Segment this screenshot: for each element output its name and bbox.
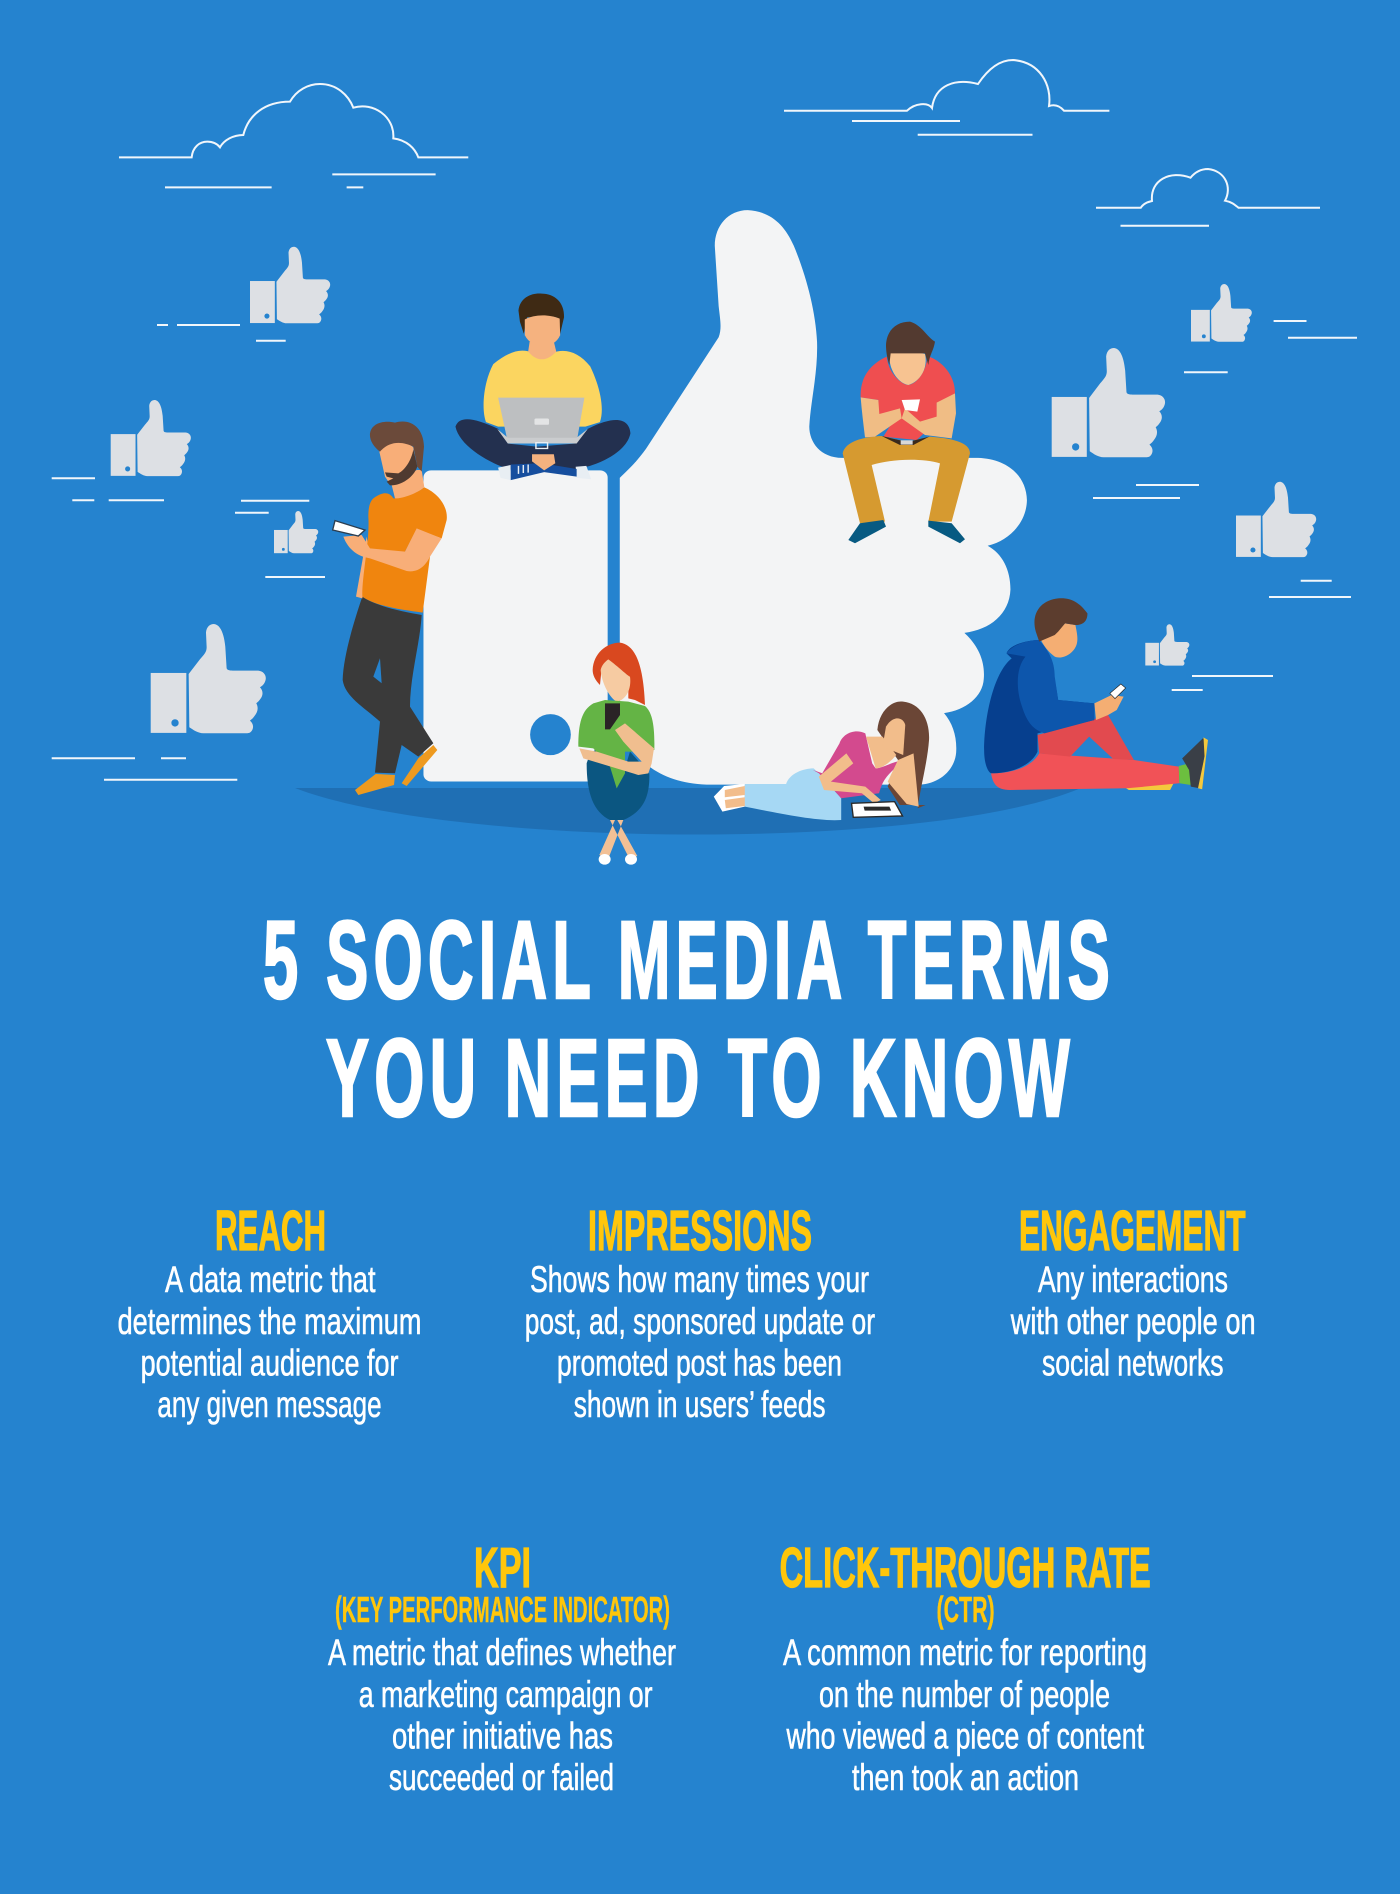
laptop — [498, 398, 584, 442]
supporting arm — [888, 753, 919, 807]
left arm — [356, 537, 369, 598]
description: click-through rate — [783, 1632, 1147, 1798]
thumb icon: upper left — [157, 247, 330, 341]
subheading: kpi: (KEY PERFORMANCE INDICATOR) — [335, 1589, 670, 1630]
shoes — [599, 854, 611, 865]
cloud: top centre — [784, 60, 1109, 135]
face — [601, 659, 630, 702]
subheading: ctr: (CTR) — [936, 1589, 995, 1630]
buckle — [901, 440, 913, 445]
shoes — [355, 745, 437, 795]
thumb icon: left — [52, 400, 191, 500]
description: reach — [118, 1259, 421, 1425]
illustration: giant thumbs up and seated man — [423, 210, 1027, 785]
thumb icon: upper right — [1184, 284, 1357, 372]
term: click-through rate — [780, 1536, 1151, 1798]
person: man with red shirt — [843, 322, 970, 543]
socks — [714, 784, 745, 812]
soles — [498, 465, 591, 480]
description: kpi: a marketing campaign or — [359, 1674, 652, 1715]
hand — [1094, 695, 1124, 720]
face — [1041, 623, 1077, 658]
trouser: extended leg — [991, 753, 1179, 790]
hood and sleeve — [1007, 640, 1094, 733]
description: reach: A data metric that — [165, 1259, 376, 1300]
belt — [882, 436, 929, 445]
description: reach: potential audience for — [141, 1343, 398, 1384]
far foot — [1124, 783, 1174, 790]
trousers — [843, 436, 970, 523]
giant thumb cuff — [423, 470, 608, 781]
arms — [579, 723, 654, 775]
face — [379, 442, 416, 484]
hair — [593, 643, 645, 705]
face — [525, 315, 560, 346]
belt — [536, 443, 548, 448]
hair — [886, 322, 935, 365]
description: click-through rate: on the number of people — [819, 1674, 1110, 1715]
description: reach: determines the maximum — [118, 1301, 421, 1342]
phone — [605, 703, 620, 729]
neck — [392, 470, 424, 498]
title — [263, 899, 1115, 1140]
beard — [385, 449, 417, 485]
sock — [1179, 763, 1191, 785]
shirt — [813, 731, 900, 798]
giant thumb hand — [620, 210, 1027, 785]
description: engagement — [1010, 1259, 1256, 1384]
feet — [725, 786, 745, 808]
phone — [902, 399, 920, 412]
hair — [518, 293, 564, 334]
description: impressions: post, ad, sponsored update or — [525, 1301, 875, 1342]
shins — [599, 820, 637, 859]
phone — [1110, 684, 1126, 699]
description: kpi: succeeded or failed — [389, 1757, 614, 1798]
term: impressions — [525, 1199, 875, 1425]
heading: reach: REACH — [215, 1199, 326, 1263]
description: engagement: Any interactions — [1038, 1259, 1228, 1300]
tablet — [852, 802, 903, 817]
hoodie body — [984, 640, 1094, 773]
knee gap — [373, 658, 382, 683]
thumb icon: large right — [1052, 348, 1199, 498]
sweater — [484, 351, 602, 427]
heading: kpi: KPI — [474, 1536, 531, 1600]
term: engagement — [1010, 1199, 1256, 1384]
term: kpi — [328, 1536, 676, 1798]
cloud: top right — [1096, 169, 1320, 226]
description: kpi: A metric that defines whether — [328, 1632, 676, 1673]
shoe sole — [1198, 737, 1208, 789]
hair — [877, 701, 929, 808]
legs — [587, 749, 649, 820]
chest — [866, 737, 896, 768]
thumb icon: small left — [235, 501, 325, 577]
shirt — [861, 356, 955, 440]
shoes — [848, 520, 965, 543]
description: click-through rate: A common metric for reporting — [783, 1632, 1147, 1673]
description: impressions: shown in users’ feeds — [574, 1384, 826, 1425]
neck — [528, 342, 556, 359]
thumb icon: small right — [1145, 624, 1273, 690]
t-shirt — [362, 487, 447, 613]
description: reach: any given message — [157, 1384, 382, 1425]
laptop base — [497, 429, 588, 444]
person: sitting man in blue hoodie — [984, 598, 1208, 790]
sneakers — [511, 463, 577, 480]
description: kpi: other initiative has — [392, 1716, 613, 1757]
tablet screen — [864, 807, 891, 811]
trouser: raised leg — [1038, 715, 1134, 760]
thumb icon: lower left — [52, 624, 266, 780]
hair — [370, 422, 424, 472]
heading: impressions: IMPRESSIONS — [588, 1199, 812, 1263]
face — [883, 718, 905, 755]
trousers — [745, 768, 841, 820]
person: man with orange shirt — [333, 422, 447, 795]
description: impressions: Shows how many times your — [530, 1259, 869, 1300]
cloud: top left — [119, 84, 468, 187]
person: woman with red hair — [578, 643, 654, 865]
ground shadow — [295, 788, 1081, 835]
description: click-through rate: then took an action — [852, 1757, 1079, 1798]
person: man with yellow sweater and laptop — [455, 293, 630, 480]
hands — [532, 454, 555, 470]
description: kpi — [328, 1632, 676, 1798]
shoe — [1182, 738, 1207, 788]
hair — [1034, 598, 1087, 642]
top — [578, 700, 654, 788]
arms — [861, 393, 956, 438]
phone — [333, 521, 365, 536]
face — [889, 352, 926, 385]
description: engagement: social networks — [1042, 1343, 1224, 1384]
trousers — [343, 597, 433, 773]
sneaker stripes — [518, 465, 528, 474]
laptop logo — [534, 419, 549, 425]
description: click-through rate: who viewed a piece of content — [786, 1716, 1145, 1757]
thumb icon: far right — [1236, 482, 1351, 597]
description: engagement: with other people on — [1010, 1301, 1256, 1342]
legs — [455, 419, 630, 469]
term: reach — [118, 1199, 421, 1425]
forearm — [343, 528, 442, 571]
description: impressions — [525, 1259, 875, 1425]
illustration: lying woman and sitting man — [714, 598, 1208, 820]
person: lying woman with tablet — [714, 701, 929, 820]
description: impressions: promoted post has been — [557, 1343, 842, 1384]
arm — [819, 753, 881, 803]
